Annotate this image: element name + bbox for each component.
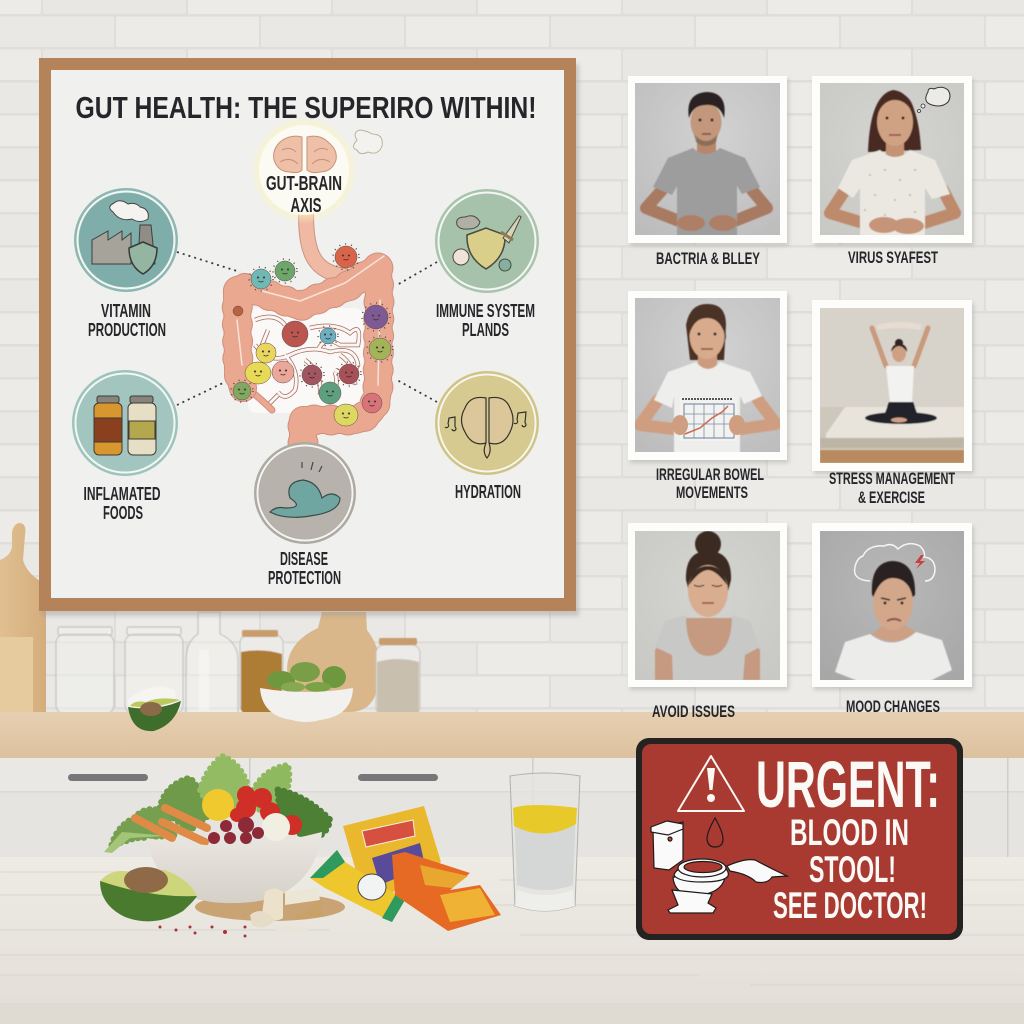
avocado half on counter bbox=[128, 698, 181, 731]
cutting boards bbox=[0, 523, 46, 718]
photo caption: irregular bowel movements bbox=[656, 465, 764, 502]
photo caption: mood changes: MOOD CHANGES bbox=[846, 697, 940, 716]
snack packets bbox=[310, 806, 501, 931]
vitamin production label bbox=[88, 301, 166, 340]
bell pepper bbox=[202, 789, 234, 821]
cabinet handles bbox=[68, 774, 438, 781]
poster title: GUT HEALTH: THE SUPERIRO WITHIN! bbox=[76, 90, 536, 125]
microbes bbox=[231, 244, 393, 426]
radish slice bbox=[262, 813, 290, 841]
disease protection label: PROTECTION bbox=[268, 568, 341, 588]
vitamin production label: VITAMIN bbox=[101, 301, 151, 321]
photo caption: stress management and exercise: & EXERCISE bbox=[858, 488, 925, 507]
thought cloud bbox=[354, 130, 382, 154]
carrots bbox=[135, 808, 207, 842]
large intestine bbox=[237, 256, 384, 443]
photo card: woman in speckled shirt bbox=[812, 76, 974, 246]
mushrooms and spices bbox=[158, 888, 322, 938]
glass of lemon water bbox=[510, 773, 580, 911]
red beans bbox=[208, 817, 264, 844]
inflamed foods badge bbox=[72, 370, 178, 476]
wooden board under bowl bbox=[195, 893, 345, 921]
round wooden board bbox=[287, 612, 380, 712]
jars icon bbox=[94, 396, 156, 455]
vitamin production badge bbox=[74, 188, 178, 292]
warning message: STOOL! bbox=[809, 849, 896, 890]
photo caption: irregular bowel movements: IRREGULAR BOWEL bbox=[656, 465, 764, 484]
dotted connectors bbox=[177, 252, 437, 405]
counter with lime bowl and avocado bbox=[0, 662, 1024, 759]
thought bubble bbox=[918, 87, 950, 112]
shield and sword icon bbox=[453, 216, 521, 271]
calendar bbox=[682, 398, 734, 438]
vitamin production label: PRODUCTION bbox=[88, 320, 166, 340]
yellow chip bag bbox=[343, 806, 441, 900]
inflamed foods label: FOODS bbox=[103, 503, 143, 523]
storm cloud bbox=[855, 544, 935, 581]
inflamed foods label bbox=[84, 484, 160, 523]
greens bbox=[104, 756, 330, 853]
brain icon bbox=[274, 136, 336, 173]
esophagus bbox=[306, 214, 345, 276]
avocado half bbox=[100, 867, 197, 921]
gut-brain label: AXIS bbox=[290, 195, 322, 217]
inflamed foods label: INFLAMATED bbox=[84, 484, 160, 504]
photo caption: avoid issues: AVOID ISSUES bbox=[652, 702, 735, 721]
white cabinets bbox=[0, 758, 1024, 858]
factory icon bbox=[92, 201, 157, 274]
wooden counter top bbox=[0, 712, 1024, 759]
kitchen shelf items bbox=[0, 523, 420, 726]
urgent warning sign bbox=[636, 738, 963, 940]
warning message: SEE DOCTOR! bbox=[773, 885, 927, 926]
intestine illustration bbox=[231, 214, 393, 443]
photo card: woman with storm cloud bbox=[812, 523, 974, 690]
warning message bbox=[773, 812, 927, 926]
gut-brain axis badge bbox=[250, 116, 382, 224]
salad bowl bbox=[104, 756, 345, 921]
warning triangle icon bbox=[678, 756, 744, 811]
protective wave icon bbox=[270, 462, 340, 517]
jar of white beans bbox=[376, 638, 420, 715]
photo card: woman holding calendar bbox=[628, 291, 789, 463]
immune system label bbox=[436, 301, 535, 340]
marble table bbox=[0, 857, 1024, 1024]
white bowl bbox=[147, 832, 322, 903]
photo caption: irregular bowel movements: MOVEMENTS bbox=[676, 483, 748, 502]
photo card: man holding stomach bbox=[628, 76, 789, 246]
tomatoes bbox=[230, 786, 302, 835]
bowl of limes bbox=[260, 662, 353, 722]
disease protection label bbox=[268, 549, 341, 588]
immune system label: PLANDS bbox=[462, 320, 509, 340]
photo card: yoga stress exercise bbox=[812, 300, 974, 474]
warning message: BLOOD IN bbox=[790, 812, 909, 853]
photo caption: virus syafest: VIRUS SYAFEST bbox=[848, 248, 938, 267]
photo caption: stress management and exercise bbox=[829, 469, 955, 507]
green-yellow bag bbox=[310, 850, 405, 922]
immune system label: IMMUNE SYSTEM bbox=[436, 301, 535, 321]
toilet with pointing hand icon bbox=[651, 821, 787, 913]
poster frame bbox=[39, 58, 579, 616]
small intestine loops bbox=[255, 317, 359, 405]
photo caption: stress management and exercise: STRESS MANAGEMENT bbox=[829, 469, 955, 488]
hydration label: HYDRATION bbox=[455, 482, 521, 502]
brain and music notes icon bbox=[445, 397, 526, 458]
immune system badge bbox=[435, 189, 539, 293]
gut-brain label: GUT-BRAIN bbox=[266, 173, 342, 195]
photo caption: bactria and blley: BACTRIA & BLLEY bbox=[656, 249, 760, 268]
poster shadow bbox=[42, 64, 579, 616]
brick wall background bbox=[0, 0, 1024, 715]
orange bag bbox=[392, 852, 501, 931]
empty glass jars bbox=[56, 612, 238, 726]
jar of nuts bbox=[240, 630, 283, 713]
disease protection label: DISEASE bbox=[280, 549, 328, 569]
small intestine background bbox=[248, 308, 363, 413]
blood drop icon bbox=[707, 818, 723, 847]
disease protection badge bbox=[254, 442, 356, 544]
gut-brain label bbox=[266, 173, 342, 217]
photo card: woman looking down bbox=[628, 523, 789, 690]
hydration badge bbox=[435, 371, 539, 475]
